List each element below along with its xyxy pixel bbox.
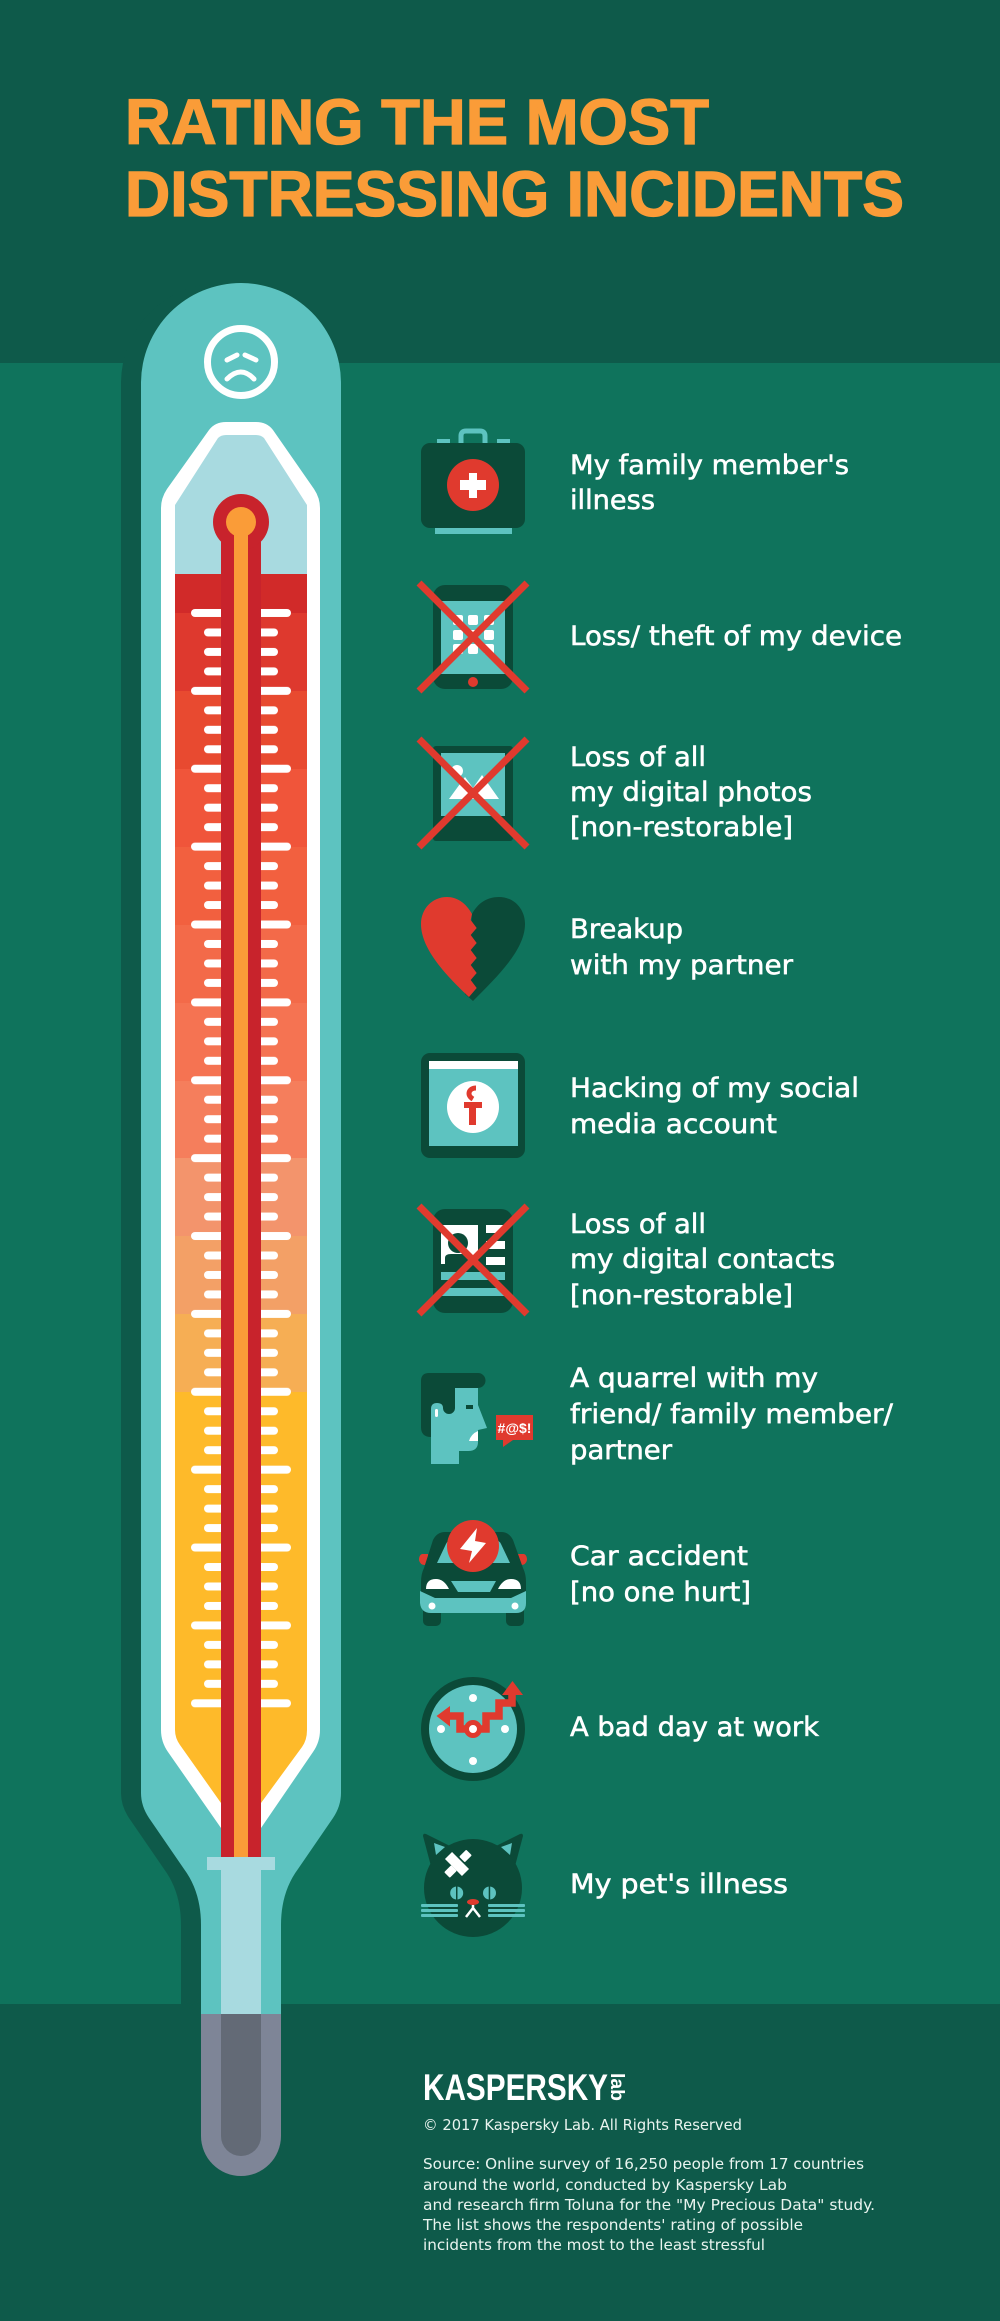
source note: The list shows the respondents' rating of possible xyxy=(422,2216,803,2234)
icon: quarrelling man: #@$! xyxy=(498,1420,531,1436)
label: photo loss: [non-restorable] xyxy=(570,812,793,843)
icon: lost photos xyxy=(419,739,527,847)
label: contacts loss: my digital contacts xyxy=(570,1244,835,1275)
thermometer shadow xyxy=(121,283,321,2004)
label: photo loss: Loss of all xyxy=(570,742,706,773)
thermometer xyxy=(121,283,341,2176)
title: DISTRESSING INCIDENTS xyxy=(125,158,904,230)
icon: quarrelling man xyxy=(421,1373,533,1464)
label: social media hacking: media account xyxy=(570,1109,777,1140)
label: photo loss xyxy=(570,742,812,843)
label: quarrel: friend/ family member/ xyxy=(570,1399,893,1430)
label: social media hacking: Hacking of my social xyxy=(570,1073,859,1104)
panel: header background xyxy=(0,0,1000,363)
colour scale bands xyxy=(170,430,315,1812)
icon: first aid kit xyxy=(421,431,525,534)
label: family illness: My family member's xyxy=(570,450,849,481)
icon: broken heart xyxy=(421,897,525,1001)
logo: Kaspersky Lab: KASPERSKY xyxy=(423,2067,608,2108)
thermometer inner tip xyxy=(221,2014,261,2156)
label: breakup: Breakup xyxy=(570,914,683,945)
label: social media hacking xyxy=(570,1073,859,1140)
title: RATING THE MOST xyxy=(125,86,709,158)
icon: clock with red arrow xyxy=(425,1681,523,1777)
label: breakup: with my partner xyxy=(570,950,793,981)
label: family illness: illness xyxy=(570,485,655,516)
label: family illness xyxy=(570,450,849,516)
source note xyxy=(422,2155,875,2254)
label: car accident xyxy=(570,1541,751,1608)
label: car accident: Car accident xyxy=(570,1541,748,1572)
icon: sad face xyxy=(208,328,274,396)
copyright: © 2017 Kaspersky Lab. All Rights Reserved xyxy=(423,2116,742,2134)
source note: incidents from the most to the least stressful xyxy=(423,2236,765,2254)
label: quarrel: A quarrel with my xyxy=(570,1363,818,1394)
orange bulb xyxy=(226,507,256,537)
label: breakup xyxy=(570,914,793,981)
red stem xyxy=(221,535,261,1857)
top bulb xyxy=(213,494,269,550)
logo: Kaspersky Lab: lab xyxy=(606,2073,627,2101)
icon: injured cat xyxy=(421,1834,525,1937)
label: contacts loss xyxy=(570,1209,835,1311)
label: quarrel: partner xyxy=(570,1435,672,1466)
thermometer metal tip xyxy=(201,2014,281,2176)
label: car accident: [no one hurt] xyxy=(570,1577,751,1608)
white scale frame xyxy=(161,422,320,1828)
label: contacts loss: Loss of all xyxy=(570,1209,706,1240)
label: contacts loss: [non-restorable] xyxy=(570,1280,793,1311)
source note: Source: Online survey of 16,250 people from 17 countries xyxy=(423,2155,864,2173)
panel: footer background xyxy=(0,2004,1000,2321)
orange mercury column xyxy=(234,522,248,1857)
thermometer glass body xyxy=(141,283,341,2014)
neck collar xyxy=(207,1857,275,1870)
icon: car accident xyxy=(419,1520,527,1626)
icon: lost device xyxy=(419,583,527,691)
label: pet illness: My pet's illness xyxy=(570,1869,788,1900)
label: quarrel xyxy=(570,1363,893,1466)
panel: middle background xyxy=(0,363,1000,2004)
label: bad day at work: A bad day at work xyxy=(570,1712,820,1743)
neck tube xyxy=(221,1870,261,2014)
scale tick marks xyxy=(191,603,291,1709)
icon: hacked social account xyxy=(421,1053,525,1158)
title xyxy=(125,86,904,230)
source note: and research firm Toluna for the "My Precious Data" study. xyxy=(423,2196,875,2214)
icon: lost contacts xyxy=(419,1206,527,1314)
label: device loss: Loss/ theft of my device xyxy=(570,621,902,652)
source note: around the world, conducted by Kaspersky Lab xyxy=(423,2176,787,2194)
label: photo loss: my digital photos xyxy=(570,777,812,808)
